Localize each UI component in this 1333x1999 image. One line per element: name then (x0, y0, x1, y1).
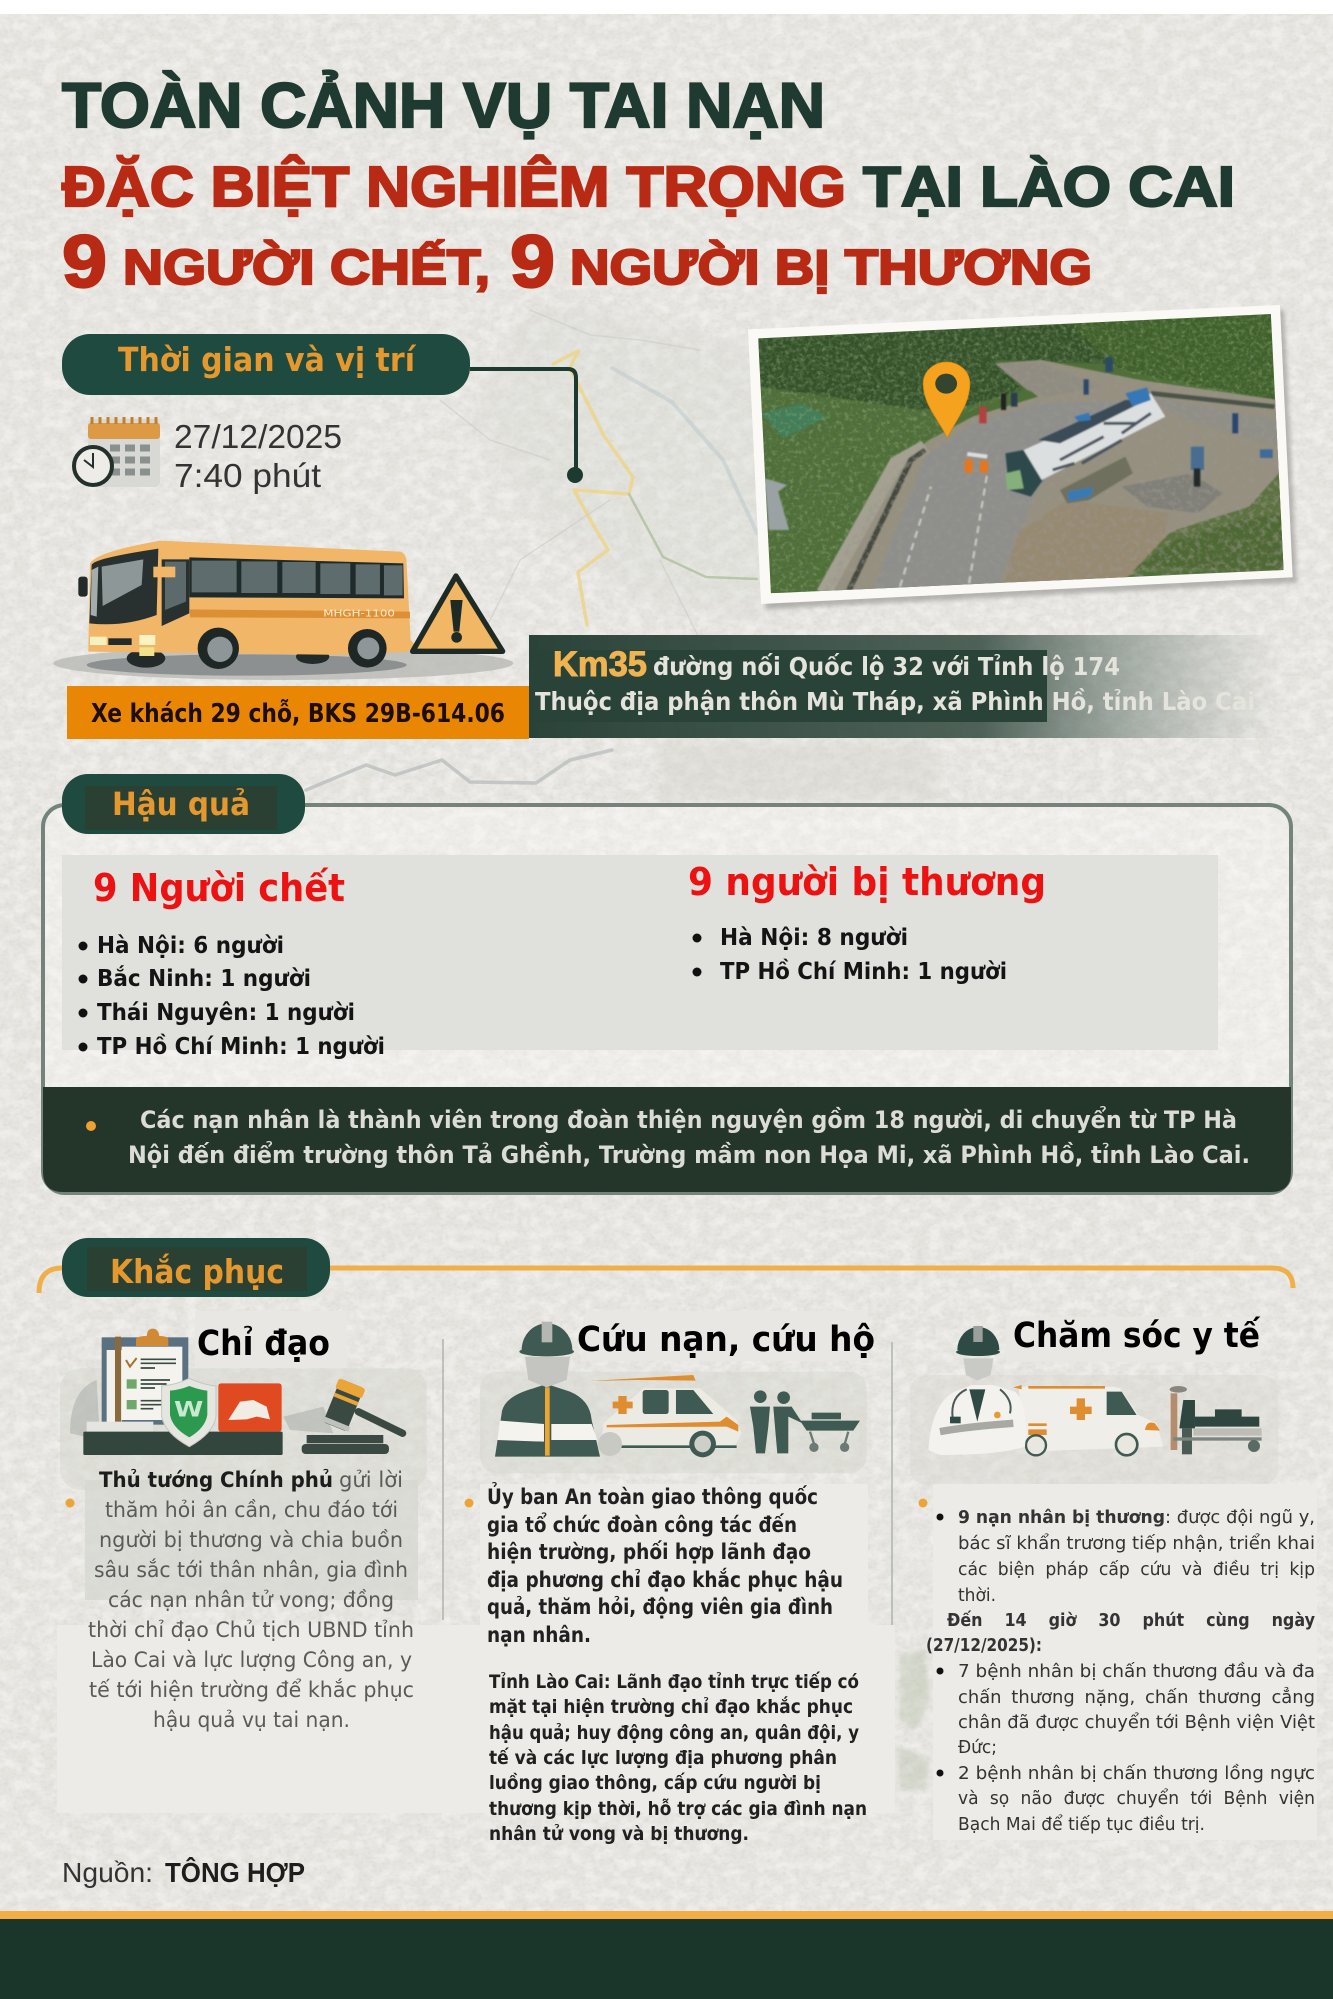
text block: Cứu nạn, cứu hộ: mặt tại hiện trường chỉ đạo khắc phục (489, 1695, 853, 1718)
map background (306, 302, 940, 800)
column: deaths: Bắc Ninh: 1 người (97, 965, 311, 992)
footer bar (0, 1911, 1333, 1999)
column: injured (688, 860, 1046, 985)
text block: Chăm sóc y tế: và sọ não được chuyển tới Bệnh viện (958, 1788, 1315, 1809)
text block: Chăm sóc y tế: các biện pháp cấp cứu và điều trị kịp (958, 1559, 1315, 1580)
text block: Cứu nạn, cứu hộ: Ủy ban An toàn giao thông quốc (487, 1482, 818, 1509)
column: injured: TP Hồ Chí Minh: 1 người (720, 958, 1007, 985)
text block: Cứu nạn, cứu hộ: thương kịp thời, hỗ trợ các gia đình nạn (489, 1796, 867, 1820)
text block: Cứu nạn, cứu hộ (417, 1482, 895, 1845)
subheading: Cứu nạn, cứu hộ: Cứu nạn, cứu hộ (577, 1320, 875, 1360)
text block: Chăm sóc y tế (918, 1484, 1317, 1840)
text block: Chỉ đạo: thăm hỏi ân cần, chu đáo tới (105, 1498, 398, 1522)
data block (62, 855, 1218, 1060)
date and time (174, 418, 342, 494)
title: 9 (510, 220, 555, 303)
text block: Cứu nạn, cứu hộ: tế và các lực lượng địa phương phân (489, 1746, 837, 1769)
text block: Cứu nạn, cứu hộ: quả, thăm hỏi, động viên gia đình (487, 1595, 833, 1619)
heading: Thời gian và vị trí: Thời gian và vị trí (118, 340, 417, 379)
text block: Chỉ đạo: gửi lời (339, 1468, 403, 1492)
warning sign (413, 576, 503, 651)
heading: Thời gian và vị trí (62, 334, 583, 483)
text block: Chỉ đạo: Thủ tướng Chính phủ (99, 1468, 333, 1492)
column: deaths (78, 866, 385, 1060)
icon: rescuer, ambulance and stretcher (480, 1322, 867, 1473)
label: vehicle: Xe khách 29 chỗ, BKS 29B-614.06 (91, 698, 505, 729)
date and time: 27/12/2025 (174, 418, 342, 455)
photo: overturned bus with location pin (748, 305, 1297, 609)
title: ĐẶC BIỆT NGHIÊM TRỌNG (62, 154, 846, 219)
column: Chỉ đạo (57, 1311, 445, 1813)
text block: Chăm sóc y tế: 9 nạn nhân bị thương (958, 1508, 1165, 1528)
text block: Chăm sóc y tế: (27/12/2025): (926, 1636, 1042, 1656)
location band: Km35 (553, 645, 647, 684)
text block: Cứu nạn, cứu hộ: nạn nhân. (487, 1623, 591, 1647)
text block: Chăm sóc y tế: Đức; (958, 1738, 997, 1758)
heading: Hậu quả: Hậu quả (112, 785, 250, 823)
text block: Cứu nạn, cứu hộ: hiện trường, phối hợp lãnh đạo (487, 1540, 811, 1564)
column: deaths: 9 Người chết (93, 866, 345, 910)
heading: Hậu quả (62, 774, 305, 834)
orange rule for Khắc phục (39, 1268, 1293, 1293)
shield letter: W (174, 1398, 203, 1423)
panel: Hậu quả (43, 774, 1291, 1193)
source line: Nguồn: (62, 1857, 153, 1888)
bus plate text: MHGH-1100 (323, 609, 395, 620)
text block: Chăm sóc y tế: Bạch Mai để tiếp tục điều trị. (958, 1814, 1205, 1835)
location band: Thuộc địa phận thôn Mù Tháp, xã Phình Hồ, tỉnh Lào Cai (535, 687, 1255, 716)
icon: bus and warning sign (53, 541, 513, 680)
text block: Chăm sóc y tế: chấn thương nặng, chấn thương cẳng (958, 1687, 1315, 1708)
text block: Chăm sóc y tế: : được đội ngũ y, (1165, 1508, 1315, 1528)
column: Chăm sóc y tế (910, 1316, 1317, 1840)
column: injured: Hà Nội: 8 người (720, 925, 908, 951)
text block: Chỉ đạo: tế tới hiện trường để khắc phục (89, 1678, 414, 1702)
column dividers (443, 1339, 892, 1625)
note band: Nội đến điểm trường thôn Tả Ghềnh, Trường mầm non Họa Mi, xã Phình Hồ, tỉnh Lào Cai. (128, 1139, 1250, 1169)
icon: doctor, ambulance and patient bed (910, 1326, 1278, 1485)
text block: Chỉ đạo: người bị thương và chia buồn (99, 1528, 403, 1552)
text block: Cứu nạn, cứu hộ: hậu quả; huy động công an, quân đội, y (489, 1722, 860, 1744)
column: deaths: Hà Nội: 6 người (97, 933, 284, 959)
text block: Cứu nạn, cứu hộ: nhân tử vong và bị thương. (489, 1823, 749, 1845)
text block: Chỉ đạo (57, 1468, 445, 1813)
column: Cứu nạn, cứu hộ (417, 1311, 895, 1845)
text block: Cứu nạn, cứu hộ: Tỉnh Lào Cai: Lãnh đạo tỉnh trực tiếp có (489, 1670, 859, 1693)
title: NGƯỜI BỊ THƯƠNG (570, 240, 1092, 295)
icon: location pin (923, 362, 970, 437)
text block: Chỉ đạo: thời chỉ đạo Chủ tịch UBND tỉnh (88, 1618, 414, 1642)
subheading: Chỉ đạo (195, 1311, 347, 1368)
text block: Chăm sóc y tế: thời. (958, 1586, 996, 1606)
icon: calendar and clock (74, 417, 160, 487)
title: NGƯỜI CHẾT, (123, 240, 490, 295)
text block: Cứu nạn, cứu hộ: gia tổ chức đoàn công tác đến (487, 1512, 797, 1537)
text block: Chỉ đạo: Lào Cai và lực lượng Công an, y (91, 1648, 412, 1672)
title: 9 (62, 220, 107, 303)
plant decoration (898, 1650, 930, 1790)
text block: Chăm sóc y tế: 2 bệnh nhân bị chấn thương lồng ngực (958, 1763, 1315, 1784)
location band (529, 635, 1281, 738)
text block: Chỉ đạo: hậu quả vụ tai nạn. (153, 1708, 350, 1732)
date and time: 7:40 phút (174, 457, 321, 494)
title: TOÀN CẢNH VỤ TAI NẠN (62, 70, 825, 141)
column: deaths: Thái Nguyên: 1 người (97, 1000, 355, 1026)
heading: Khắc phục (62, 1238, 330, 1297)
subheading: Chỉ đạo: Chỉ đạo (197, 1324, 330, 1364)
text block: Chăm sóc y tế: bác sĩ khẩn trương tiếp nhận, triển khai (958, 1533, 1315, 1554)
note band: Các nạn nhân là thành viên trong đoàn thiện nguyện gồm 18 người, di chuyển từ TP Hà (140, 1104, 1237, 1134)
heading: Khắc phục: Khắc phục (110, 1252, 284, 1291)
label: vehicle (67, 686, 529, 739)
text block: Chỉ đạo: các nạn nhân tử vong; đồng (108, 1588, 394, 1612)
icon: checklist, shield and gavel (60, 1329, 427, 1490)
text block: Cứu nạn, cứu hộ: địa phương chỉ đạo khắc phục hậu (487, 1567, 843, 1592)
subheading: Chăm sóc y tế: Chăm sóc y tế (1013, 1316, 1261, 1356)
text block: Chỉ đạo: sâu sắc tới thân nhân, gia đình (94, 1558, 408, 1582)
text block: Chăm sóc y tế: 7 bệnh nhân bị chấn thương đầu và đa (958, 1661, 1315, 1682)
source line (62, 1856, 305, 1888)
title (62, 70, 1235, 303)
column: injured: 9 người bị thương (688, 860, 1046, 904)
text block: Cứu nạn, cứu hộ: luồng giao thông, cấp cứu người bị (489, 1771, 821, 1794)
text block: Chăm sóc y tế: chân đã được chuyển tới Bệnh viện Việt (958, 1712, 1315, 1733)
source line: TÔNG HỢP (165, 1856, 305, 1888)
note band (43, 1087, 1291, 1192)
location band: đường nối Quốc lộ 32 với Tỉnh lộ 174 (653, 652, 1120, 681)
column: deaths: TP Hồ Chí Minh: 1 người (97, 1033, 385, 1060)
title: TẠI LÀO CAI (863, 155, 1235, 219)
